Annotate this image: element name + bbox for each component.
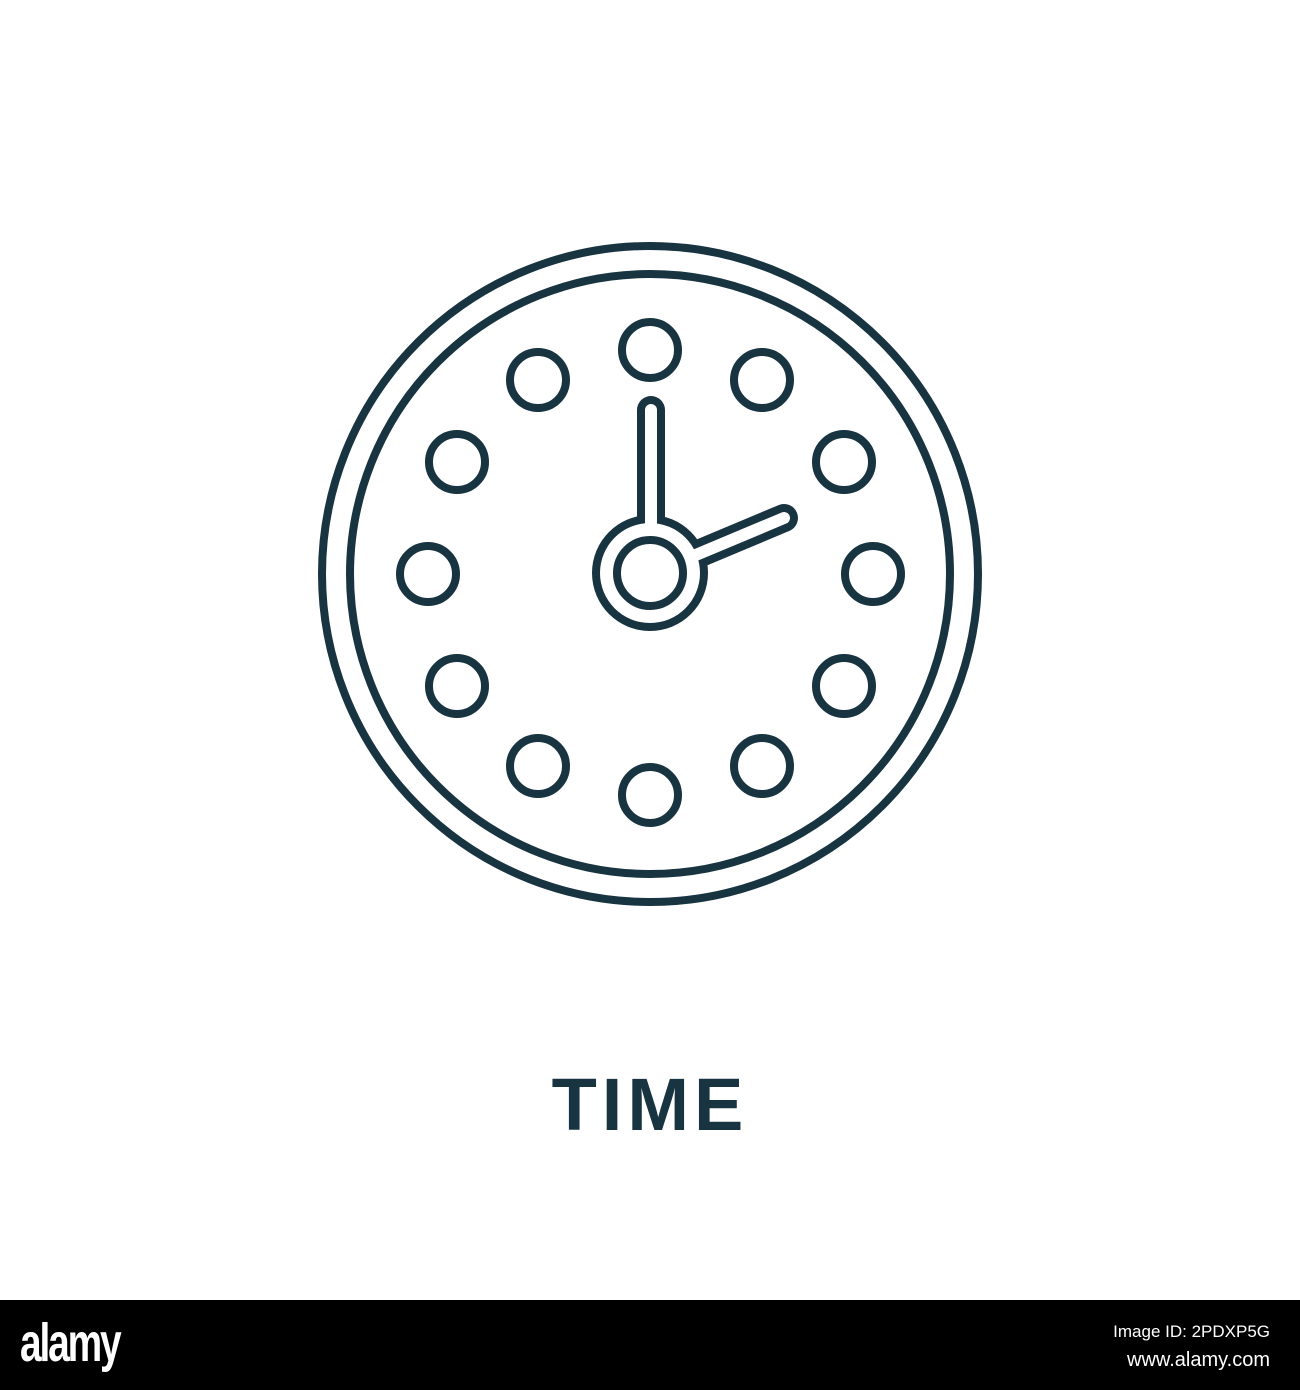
image id: Image ID: 2PDXP5G <box>1113 1322 1270 1341</box>
image id: www.alamy.com <box>1127 1349 1270 1371</box>
clock hands <box>592 410 784 631</box>
image id <box>1113 1322 1270 1371</box>
inner ring <box>350 274 950 874</box>
outer ring <box>322 246 978 902</box>
hour dots <box>400 322 901 823</box>
title: TIME <box>552 1063 748 1146</box>
icon: clock <box>318 242 982 906</box>
footer bar <box>0 1300 1300 1390</box>
logo: alamy <box>20 1313 119 1373</box>
